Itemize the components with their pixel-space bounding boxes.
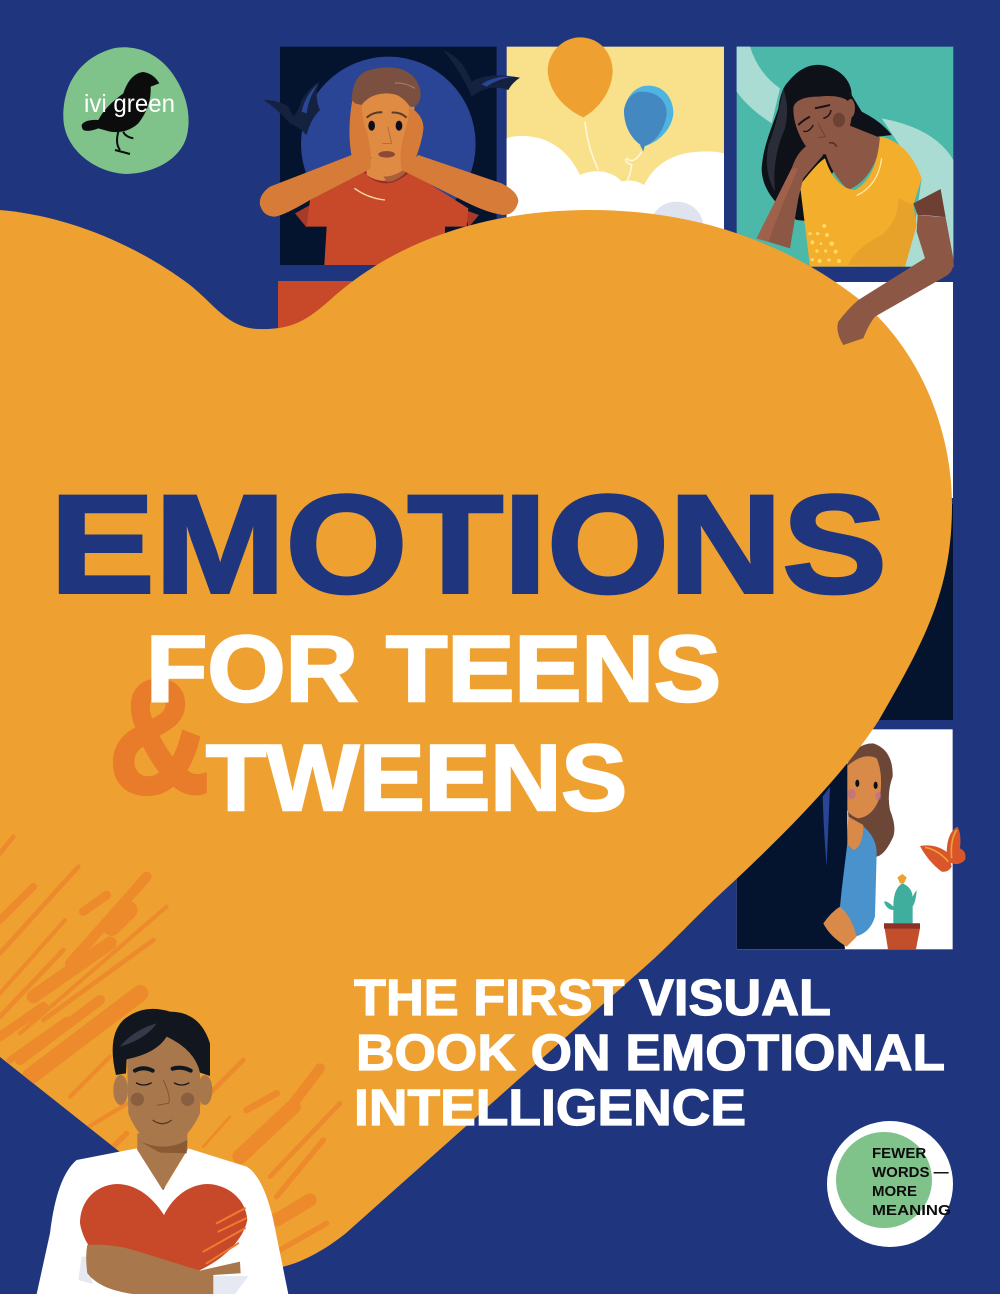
icon: butterfly — [920, 827, 966, 872]
cuffs — [78, 1257, 248, 1294]
tagline: THE FIRST VISUAL — [354, 969, 831, 1026]
icon: cactus in pot — [884, 874, 920, 949]
badge: fewer words more meaning: MEANING — [872, 1202, 951, 1219]
icon: orange balloon — [548, 37, 613, 117]
panel: sad woman — [737, 47, 953, 267]
man's ears — [113, 1075, 212, 1105]
icon: blue balloon — [624, 86, 673, 152]
man's neck — [137, 1133, 187, 1190]
woman's arm over heart — [837, 189, 954, 345]
woman's left arm — [757, 143, 823, 248]
boy's neck — [366, 155, 405, 182]
heart — [0, 210, 952, 1267]
woman's hair — [762, 65, 892, 221]
boy's face — [360, 85, 415, 164]
woman's shirt — [800, 137, 922, 267]
panel: girl peeking behind curtain — [737, 729, 953, 949]
logo blob — [63, 47, 189, 174]
boy's hair — [352, 67, 421, 107]
boy's collar — [361, 167, 411, 183]
red heart — [80, 1184, 247, 1272]
curtain — [737, 750, 847, 949]
girl's hair — [847, 743, 894, 857]
badge: fewer words more meaning — [827, 1121, 953, 1247]
woman's chest — [825, 125, 882, 190]
badge: fewer words more meaning: WORDS — — [872, 1164, 949, 1181]
ampersand: & — [109, 647, 209, 826]
title: EMOTIONS: EMOTIONS — [50, 466, 887, 622]
tagline: INTELLIGENCE — [354, 1079, 746, 1136]
panel: balloons in the sky — [507, 37, 724, 252]
man's hair — [113, 1009, 210, 1076]
subtitle line: TWEENS: TWEENS — [206, 725, 627, 830]
badge: fewer words more meaning: MORE — [872, 1183, 917, 1200]
girl's shirt — [837, 825, 877, 937]
paint texture on heart — [0, 837, 340, 1250]
man hugging heart — [37, 1009, 288, 1294]
logo: ivi green — [63, 47, 189, 174]
panel: scared boy with bats — [260, 47, 520, 265]
tagline: BOOK ON EMOTIONAL — [356, 1024, 945, 1081]
panel: lower grid of panels — [278, 281, 953, 720]
boy's sleeves — [295, 205, 479, 228]
logo wordmark: ivi green — [84, 90, 175, 118]
icon: right bat — [443, 50, 520, 97]
boy's shirt — [307, 170, 468, 265]
icon: crow — [82, 72, 159, 154]
badge: fewer words more meaning: FEWER — [872, 1145, 926, 1162]
girl's face — [845, 756, 881, 850]
girl's hand — [823, 907, 857, 947]
woman's face — [793, 96, 855, 154]
tagline — [354, 969, 945, 1136]
man's shirt — [37, 1148, 288, 1294]
boy's arms and hands — [260, 100, 518, 217]
man's face — [127, 1033, 200, 1147]
subtitle line: FOR TEENS: FOR TEENS — [146, 616, 721, 721]
man's arms — [86, 1245, 241, 1294]
clouds — [507, 136, 724, 252]
icon: left bat — [263, 81, 320, 135]
